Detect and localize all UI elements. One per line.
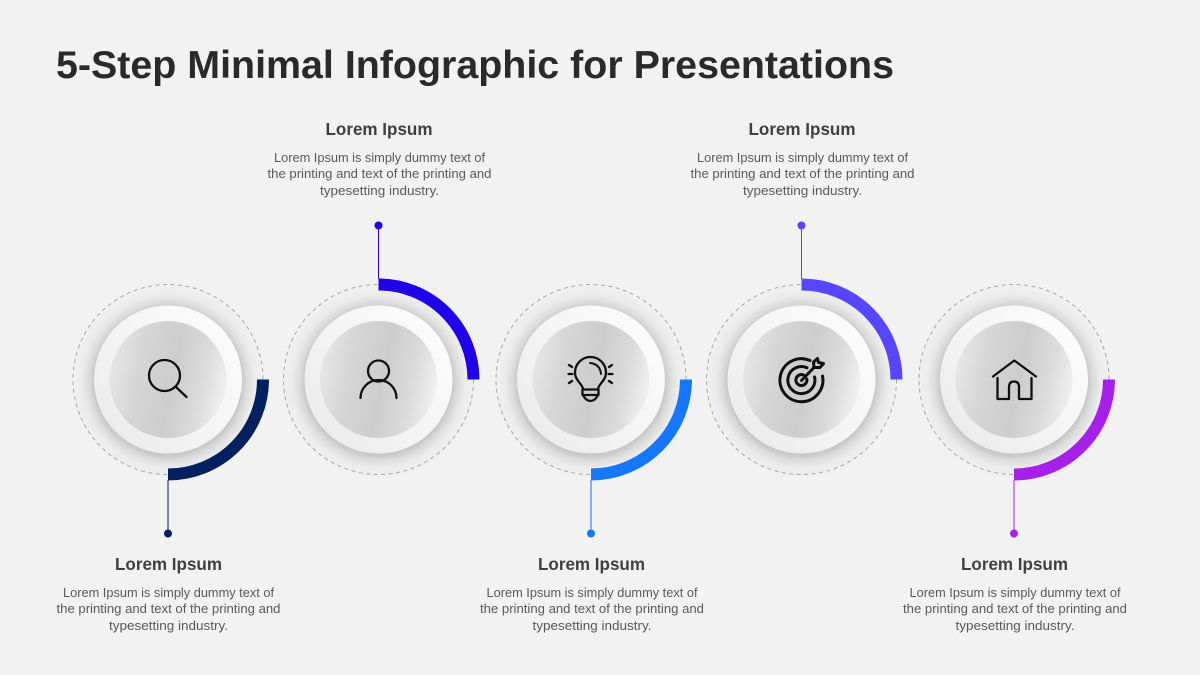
title: 5-Step Minimal Infographic for Presentations bbox=[56, 44, 894, 87]
step 1: search bbox=[56, 284, 280, 633]
step 3 description: Lorem Ipsum is simply dummy text of bbox=[486, 585, 698, 600]
step 4 description bbox=[690, 150, 914, 198]
step 4: target bbox=[690, 119, 914, 478]
step 4 arc bbox=[802, 284, 896, 380]
step 3 disc bbox=[494, 284, 688, 478]
step 3 connector bbox=[587, 480, 595, 538]
step 1 connector bbox=[164, 480, 172, 538]
step 2 description bbox=[268, 150, 492, 198]
icon: lightbulb bbox=[568, 357, 612, 401]
step 2 arc bbox=[378, 284, 474, 380]
icon: target with arrow bbox=[780, 358, 824, 402]
icon: house bbox=[993, 360, 1036, 399]
step 4 description: Lorem Ipsum is simply dummy text of bbox=[697, 150, 908, 165]
step 5: house bbox=[903, 284, 1127, 633]
step 5 description: Lorem Ipsum is simply dummy text of bbox=[910, 585, 1121, 600]
step 4 description: the printing and text of the printing and bbox=[690, 166, 914, 181]
step 2 heading: Lorem Ipsum bbox=[326, 119, 432, 139]
icon: person bbox=[360, 360, 396, 398]
step 4 connector bbox=[798, 222, 806, 279]
step 4 description: typesetting industry. bbox=[743, 183, 862, 198]
step 3 description: the printing and text of the printing and bbox=[480, 601, 704, 616]
step 2 description: the printing and text of the printing and bbox=[268, 166, 492, 181]
step 5 disc bbox=[917, 284, 1111, 478]
step 1 description bbox=[56, 585, 280, 633]
step 1 description: the printing and text of the printing and bbox=[56, 601, 280, 616]
step 1 heading: Lorem Ipsum bbox=[115, 554, 222, 574]
step 5 connector bbox=[1010, 480, 1018, 538]
step 2: person bbox=[268, 119, 492, 478]
step 2 description: Lorem Ipsum is simply dummy text of bbox=[274, 150, 485, 165]
step 5 arc bbox=[1014, 380, 1109, 474]
step 2 connector bbox=[374, 222, 382, 279]
step 1 description: Lorem Ipsum is simply dummy text of bbox=[63, 585, 274, 600]
step 3: lightbulb bbox=[480, 284, 704, 633]
step 1 arc bbox=[168, 380, 263, 474]
step 5 description: typesetting industry. bbox=[956, 618, 1074, 633]
step 3 description bbox=[480, 585, 704, 633]
step 4 heading: Lorem Ipsum bbox=[748, 119, 856, 139]
step 5 description bbox=[903, 585, 1127, 633]
step 1 disc bbox=[71, 284, 265, 478]
icon: magnifying glass bbox=[149, 360, 186, 397]
step 2 description: typesetting industry. bbox=[320, 183, 439, 198]
step 3 arc bbox=[591, 380, 686, 474]
step 5 description: the printing and text of the printing and bbox=[903, 601, 1127, 616]
step 1 description: typesetting industry. bbox=[109, 618, 228, 633]
step 2 disc bbox=[282, 284, 476, 478]
step 3 heading: Lorem Ipsum bbox=[538, 554, 645, 574]
step 4 disc bbox=[704, 284, 898, 478]
step 5 heading: Lorem Ipsum bbox=[961, 554, 1068, 574]
step 3 description: typesetting industry. bbox=[532, 618, 652, 633]
